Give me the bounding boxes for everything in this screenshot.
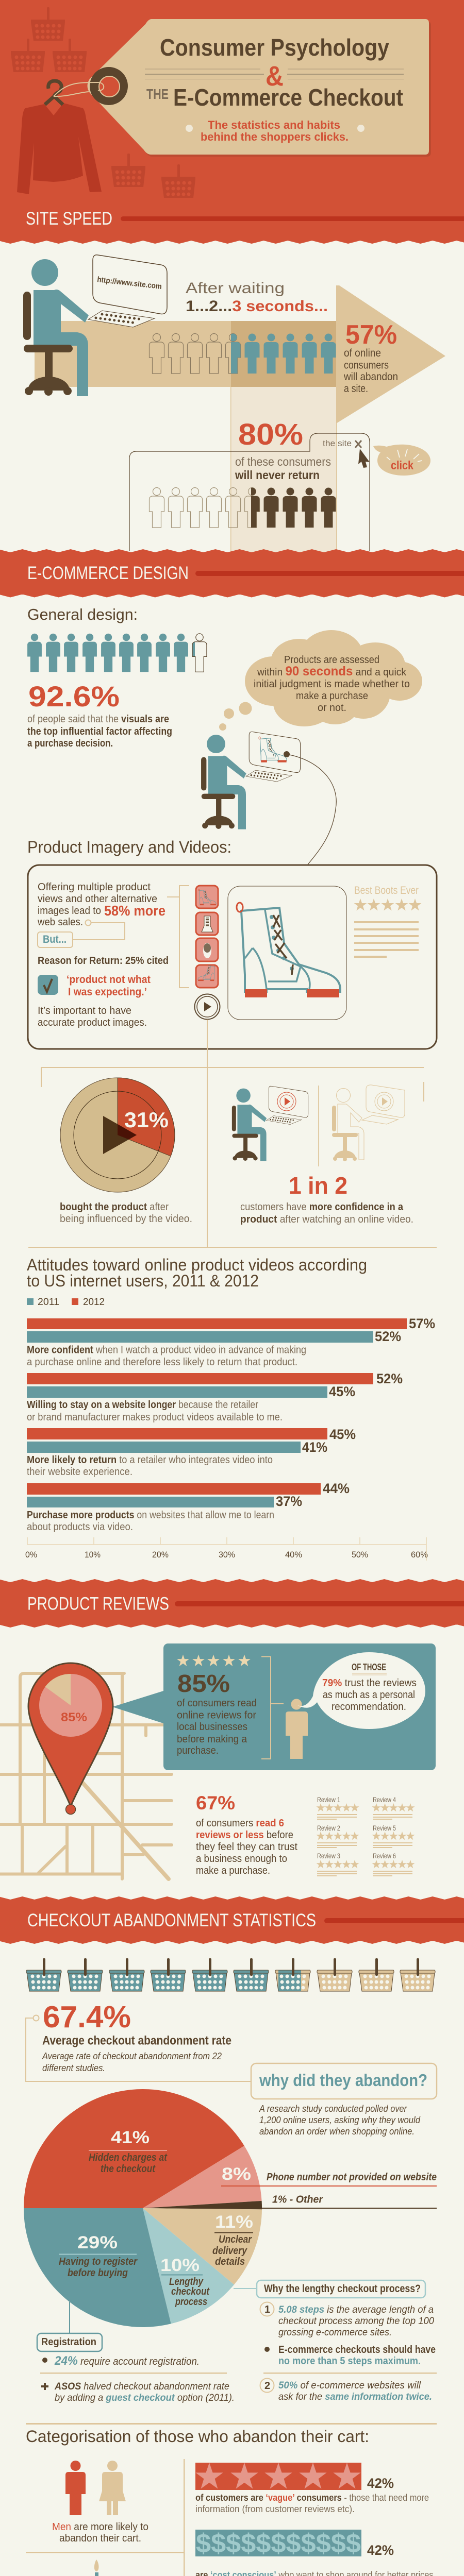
bar chart: attitudes: Willing to stay on a website longer because the retailer [27, 1399, 258, 1411]
decorative baskets [11, 7, 195, 198]
stat: 57 percent: of online [344, 347, 381, 359]
bar chart: attitudes: 30% [219, 1550, 235, 1560]
pie chart: abandonment reasons: 11% [215, 2212, 253, 2232]
panel: product page: ‘product not what [67, 974, 151, 986]
icon: play button [195, 994, 220, 1019]
text: bought the product: being influenced by the video. [60, 1213, 192, 1225]
stat: 92.6 percent [27, 680, 172, 749]
bar chart: attitudes: 52% [375, 1329, 401, 1344]
pie chart: abandonment reasons: 41% [111, 2128, 150, 2147]
stat: 67 percent [196, 1792, 297, 1876]
main title: Consumer Psychology [160, 34, 389, 61]
heading: general design: General design: [27, 605, 138, 623]
heading: attitudes toward videos: Attitudes toward online product videos according [27, 1256, 367, 1274]
stat: 67 percent: make a purchase. [196, 1865, 270, 1876]
stat: 80 percent: 80% [238, 418, 303, 451]
stat: 1 in 2: 1 in 2 [289, 1172, 347, 1199]
panel: reviews callout: as much as a personal [323, 1689, 415, 1701]
bar chart: attitudes: 52% [376, 1371, 403, 1386]
section band: checkout abandonment: CHECKOUT ABANDONMENT STATISTICS [27, 1910, 316, 1930]
mini reviews [316, 1795, 415, 1876]
panel: reviews callout: purchase. [177, 1745, 219, 1756]
pie chart: abandonment reasons [24, 2089, 262, 2327]
stat: 67.4 percent: 67.4% [43, 2000, 131, 2034]
panel: product page: Offering multiple product [38, 882, 151, 893]
panel: product page: 58% more [104, 903, 165, 919]
panel: product page: I was expecting.’ [68, 986, 147, 998]
stat: 92.6 percent: a purchase decision. [27, 738, 113, 749]
pie chart: abandonment reasons: 8% [222, 2164, 251, 2184]
stat: 67.4 percent: different studies. [42, 2063, 105, 2073]
panel: why the lengthy checkout: 2 [264, 2380, 270, 2392]
people row: 92.6 percent [27, 634, 207, 672]
text: after waiting: After waiting [186, 280, 285, 297]
panel: reviews callout: recommendation. [332, 1701, 406, 1713]
text: men more likely [52, 2521, 148, 2544]
browser window outline [129, 433, 370, 551]
stat: 80 percent [235, 418, 331, 482]
thought cloud: within 90 seconds and a quick [257, 664, 407, 679]
mini reviews: Review 2 [317, 1824, 340, 1832]
stat: 1 in 2: customers have more confidence in a [240, 1201, 404, 1213]
bar: cost conscious: 42% [367, 2543, 394, 2558]
bar chart: attitudes [25, 1316, 435, 1561]
pie side labels [221, 2172, 437, 2209]
pie side labels: Phone number not provided on website [267, 2172, 437, 2183]
panel: reviews callout: online reviews for [177, 1709, 256, 1721]
bar chart: attitudes: 44% [323, 1481, 350, 1496]
thought cloud: make a purchase [296, 690, 368, 702]
section band: product reviews: PRODUCT REVIEWS [27, 1594, 169, 1614]
site speed arrow band [35, 285, 445, 552]
text: men more likely: abandon their cart. [59, 2533, 141, 2544]
text: men more likely: Men are more likely to [52, 2521, 148, 2533]
panel: why the lengthy checkout: 5.08 steps is the average length of a [278, 2304, 434, 2315]
map pin: 85% [61, 1710, 87, 1724]
section band: product reviews [0, 1579, 464, 1628]
seated person at computer [23, 255, 167, 396]
title tag: E-Commerce Checkout [173, 84, 403, 111]
thumbnails [196, 886, 218, 988]
stat: 67.4 percent: Average rate of checkout abandonment from 22 [42, 2051, 222, 2061]
panel: product page: Reason for Return: 25% cited [38, 955, 169, 967]
mini reviews: Review 6 [373, 1852, 396, 1860]
heading: site speed: SITE SPEED [26, 209, 112, 229]
heading: categorisation: Categorisation of those who abandon their cart: [26, 2427, 369, 2446]
main product window [228, 886, 346, 1020]
pie chart: abandonment reasons: Having to register [59, 2256, 138, 2267]
bar chart: attitudes: 50% [352, 1550, 368, 1560]
stat: 57 percent: 57% [345, 320, 397, 350]
mini reviews: Review 3 [317, 1852, 340, 1860]
stat: 67.4 percent [26, 2000, 251, 2081]
title tag: behind the shoppers clicks. [201, 130, 349, 143]
seated viewers: 1 in 2 [232, 1085, 405, 1166]
pie side labels: 1% - Other [272, 2194, 323, 2205]
text: after waiting [186, 280, 328, 315]
title tag: THE [146, 86, 169, 102]
stat: 92.6 percent: 92.6% [28, 680, 120, 713]
bar chart: attitudes: 45% [329, 1427, 356, 1442]
stat: 67 percent: a business enough to [196, 1853, 287, 1865]
seated person with boot on screen [201, 732, 301, 829]
chart: 31 percent pie [60, 1078, 175, 1192]
bar chart: attitudes: 57% [409, 1316, 435, 1331]
panel: product page [28, 865, 437, 1049]
map roads [0, 1673, 172, 1879]
panel: why the lengthy checkout: no more than 5 steps maximum. [278, 2355, 421, 2367]
panel: why the lengthy checkout: checkout process among the top 100 [278, 2316, 434, 2327]
bar chart: attitudes: 0% [25, 1550, 37, 1560]
heading: product imagery: Product Imagery and Videos: [27, 838, 231, 856]
pie chart: abandonment reasons: details [215, 2256, 245, 2267]
stat: 57 percent [343, 320, 398, 395]
pie chart: abandonment reasons: Lengthy [169, 2276, 204, 2287]
title tag [54, 19, 431, 157]
section band: e-commerce design [0, 549, 464, 598]
basket row: 67.4 percent [26, 1958, 435, 1991]
thumbnail boots [198, 889, 216, 981]
stat: 57 percent: a site. [344, 383, 368, 395]
legend: 2012 [83, 1297, 105, 1308]
pie chart: abandonment reasons: Unclear [219, 2234, 252, 2245]
bar: vague consumers: information (from customer reviews etc). [195, 2504, 355, 2514]
stat: 92.6 percent: of people said that the visuals are [27, 714, 169, 725]
people row: 57 percent [150, 334, 336, 374]
stat: 92.6 percent: the top influential factor affecting [27, 726, 172, 737]
seated person at computer: http://www.site.com [97, 275, 162, 291]
panel: why the lengthy checkout: grossing e-commerce sites. [278, 2327, 392, 2338]
heading: attitudes toward videos [27, 1256, 367, 1290]
bar chart: attitudes: More likely to return to a retailer who integrates video into [27, 1454, 273, 1466]
heading: site speed [26, 209, 464, 229]
title tag: & [266, 61, 284, 92]
text: bought the product [60, 1201, 192, 1225]
pie chart: abandonment reasons: the checkout [101, 2163, 156, 2175]
mini reviews: Review 4 [373, 1795, 396, 1804]
review column [354, 885, 421, 958]
callout: why did they abandon: 1,200 online users, asking why they would [259, 2115, 421, 2125]
icon: man and woman [65, 2461, 126, 2515]
stat: 57 percent: consumers [344, 360, 389, 371]
bar chart: attitudes: More confident when I watch a product video in advance of making [27, 1345, 306, 1356]
browser window outline: the site [323, 438, 352, 448]
pie chart: abandonment reasons: 10% [160, 2256, 200, 2275]
panel: why the lengthy checkout: 1 [264, 2304, 270, 2315]
mini reviews: Review 1 [317, 1795, 340, 1804]
panel: why the lengthy checkout: ask for the same information twice. [278, 2392, 432, 2402]
bar chart: attitudes: 45% [329, 1384, 355, 1399]
review column: Best Boots Ever [354, 885, 419, 896]
map pin [28, 1663, 113, 1815]
panel: registration: 24% require account registration. [54, 2354, 200, 2368]
pie chart: abandonment reasons: Hidden charges at [89, 2152, 168, 2163]
text: after waiting: 1...2...3 seconds... [186, 298, 328, 315]
section band: checkout abandonment [0, 1896, 464, 1944]
bar: vague consumers [195, 2463, 429, 2514]
stat: 57 percent: will abandon [343, 371, 398, 383]
stat: 67 percent: reviews or less before [196, 1829, 293, 1841]
panel: reviews callout: of consumers read [177, 1698, 257, 1709]
stat: 80 percent: will never return [235, 468, 320, 482]
bar chart: attitudes: a purchase online and therefore less likely to return that product. [27, 1357, 297, 1368]
callout: why did they abandon: why did they abandon? [259, 2071, 427, 2090]
panel: reviews callout [112, 1643, 436, 1770]
section band: e-commerce design: E-COMMERCE DESIGN [27, 563, 189, 583]
callout: why did they abandon: abandon an order when shopping online. [259, 2126, 415, 2137]
stat: 67 percent: 67% [196, 1792, 235, 1814]
people row: 80 percent [150, 487, 336, 528]
pie chart: abandonment reasons: before buying [68, 2267, 128, 2279]
stat: 1 in 2: product after watching an online video. [240, 1214, 413, 1225]
pie chart: abandonment reasons: checkout [171, 2286, 210, 2297]
title tag: The statistics and habits [208, 118, 340, 131]
pie chart: abandonment reasons: delivery [212, 2245, 247, 2257]
bar: vague consumers: of customers are ‘vague’ consumers - those that need more [195, 2493, 429, 2503]
panel: why the lengthy checkout [234, 2280, 437, 2402]
pie chart: abandonment reasons: process [175, 2296, 207, 2308]
mini reviews: Review 5 [373, 1824, 396, 1832]
bar chart: attitudes: 40% [285, 1550, 302, 1560]
text: bought the product: bought the product after [60, 1201, 169, 1213]
video tree connector [28, 1020, 437, 1247]
panel: registration: Registration [41, 2336, 96, 2348]
bar chart: attitudes: 37% [276, 1494, 302, 1509]
panel: product page: web sales. [37, 917, 83, 928]
bar chart: attitudes: 20% [152, 1550, 169, 1560]
panel: product page: images lead to [38, 905, 101, 917]
panel: reviews callout: 79% trust the reviews [322, 1677, 417, 1689]
panel: registration: by adding a guest checkout option (2011). [55, 2393, 235, 2403]
header band [0, 0, 464, 244]
callout: click bubble [373, 445, 430, 476]
panel: reviews callout: 85% [177, 1670, 230, 1698]
bar chart: attitudes: their website experience. [27, 1466, 132, 1478]
panel: why the lengthy checkout: Why the lengthy checkout process? [264, 2283, 421, 2295]
panel: reviews callout: OF THOSE [352, 1662, 386, 1672]
bar: cost conscious [195, 2529, 436, 2576]
bar: vague consumers: 42% [367, 2476, 394, 2491]
thought cloud: or not. [318, 702, 346, 714]
thought cloud [219, 630, 422, 731]
icon: shirt on hanger [17, 81, 102, 194]
stat: 67 percent: of consumers read 6 [196, 1818, 284, 1829]
panel: reviews callout: before making a [177, 1734, 247, 1745]
panel: registration: ASOS halved checkout abandonment rate [54, 2381, 229, 2392]
stat: 67.4 percent: Average checkout abandonment rate [42, 2034, 231, 2047]
bar: cost conscious: $$$$$$$$$$$ [196, 2529, 361, 2558]
stat: 80 percent: of these consumers [235, 455, 331, 468]
panel: registration [37, 2302, 235, 2403]
panel: product page: It’s important to have [38, 1005, 131, 1016]
bar chart: attitudes: 10% [85, 1550, 101, 1560]
thought cloud: initial judgment is made whether to [254, 679, 410, 690]
panel: product page: But... [43, 934, 67, 945]
connector curve [284, 751, 336, 865]
panel: why the lengthy checkout: 50% of e-commerce websites will [278, 2380, 421, 2391]
bar chart: attitudes: Purchase more products on websites that allow me to learn [27, 1510, 274, 1521]
bar chart: attitudes: 41% [302, 1439, 327, 1455]
bar chart: attitudes: about products via video. [27, 1521, 133, 1533]
chart: 31 percent pie: 31% [124, 1108, 169, 1132]
heading: attitudes toward videos: to US internet users, 2011 & 2012 [27, 1272, 259, 1290]
bar chart: attitudes: 60% [411, 1550, 428, 1560]
icon: birthday cake [44, 2560, 150, 2576]
pie chart: abandonment reasons: 29% [77, 2233, 118, 2252]
bar chart: attitudes: or brand manufacturer makes product videos available to me. [27, 1412, 283, 1423]
stat: 67 percent: they feel they can trust [196, 1841, 297, 1853]
panel: why the lengthy checkout: E-commerce checkouts should have [278, 2344, 436, 2355]
stat: 1 in 2 [240, 1172, 413, 1225]
thought cloud: Products are assessed [284, 654, 379, 666]
legend [27, 1297, 105, 1308]
panel: reviews callout: local businesses [177, 1721, 247, 1733]
callout: click bubble: click [391, 459, 413, 472]
panel: product page: views and other alternative [38, 893, 157, 905]
panel: product page: accurate product images. [38, 1017, 147, 1028]
legend: 2011 [38, 1297, 59, 1308]
callout: why did they abandon [251, 2063, 437, 2137]
callout: why did they abandon: A research study conducted polled over [259, 2104, 407, 2114]
